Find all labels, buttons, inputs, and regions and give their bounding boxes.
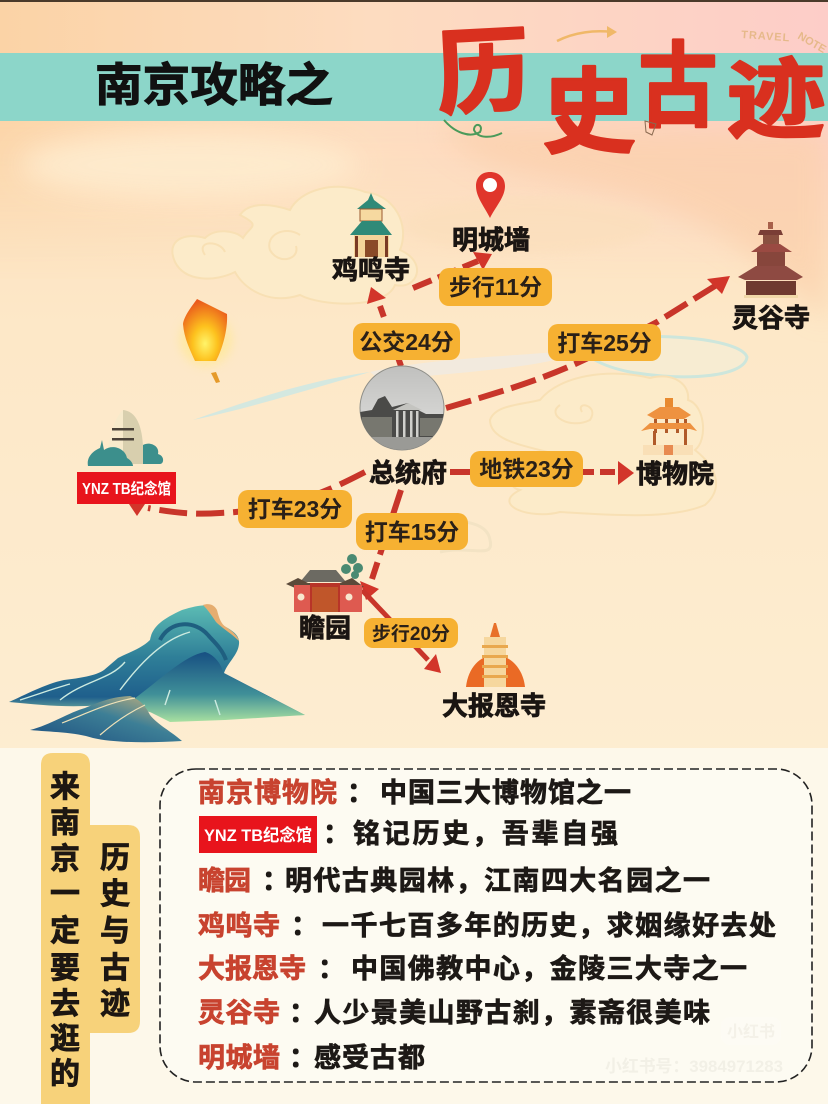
list row: YNZ TB纪念馆: YNZ TB纪念馆 [204, 825, 312, 845]
label: 大报恩寺: 大报恩寺 [442, 691, 546, 721]
mountains [9, 604, 305, 742]
pill: 公交24分: 公交24分 [359, 329, 454, 355]
list row: 灵谷寺: 人少景美山野古刹，素斋很美味 [314, 998, 710, 1028]
label: 博物院: 博物院 [636, 459, 714, 489]
pill: 步行11分: 步行11分 [449, 274, 542, 300]
watermark: 小红书号：3984971283 [605, 1057, 783, 1076]
lower wisp [440, 522, 491, 552]
lantern [180, 299, 232, 383]
label: 总统府: 总统府 [369, 458, 447, 488]
decoration: arrow and travel text: NOTE [796, 30, 828, 56]
pill: 打车25分: 打车25分 [557, 330, 652, 356]
pill: 打车15分 [356, 513, 468, 550]
icon: 灵谷寺 temple [738, 222, 803, 298]
list row: 明城墙 [198, 1042, 425, 1073]
list row: YNZ TB纪念馆: ： [323, 819, 350, 849]
watermark [605, 1017, 783, 1076]
tab: 来南京一定要去逛的: 来 [50, 771, 80, 804]
icon: 瞻园 gate [286, 554, 364, 612]
tab: 来南京一定要去逛的: 定 [50, 915, 80, 948]
list row: 鸡鸣寺: ： [291, 911, 318, 941]
list row: 南京博物院: ： [347, 778, 374, 808]
tab: 来南京一定要去逛的: 的 [50, 1058, 80, 1091]
light teal sweep [193, 336, 747, 420]
list row: 瞻园: 明代古典园林，江南四大名园之一 [285, 866, 710, 896]
list row: YNZ TB纪念馆: 铭记历史，吾辈自强 [353, 819, 618, 849]
icon: YNZ memorial [88, 410, 163, 466]
route: 打车 to 瞻园 [360, 490, 401, 600]
list row: 瞻园: ： [262, 866, 289, 896]
tab: 来南京一定要去逛的: 京 [50, 843, 80, 876]
title: 历史古迹: 古 [638, 36, 718, 139]
pill: 打车15分: 打车15分 [365, 519, 459, 545]
tab: 历史与古迹 [90, 825, 140, 1033]
decoration: arrow and travel text: TRAVEL [741, 29, 791, 44]
pin: 明城墙 [476, 172, 505, 218]
title band [0, 53, 828, 121]
title: 历史古迹: 历 [434, 19, 532, 127]
icon: 鸡鸣寺 pagoda [350, 193, 392, 257]
pill: 步行20分 [364, 618, 458, 648]
title: 南京攻略之: 南京攻略之 [95, 59, 333, 111]
tab: 来南京一定要去逛的: 要 [50, 952, 80, 985]
dashed list box [160, 769, 812, 1082]
tab: 来南京一定要去逛的 [41, 753, 90, 1104]
route: 地铁 to 博物院 [450, 461, 634, 485]
list row: 大报恩寺: 中国佛教中心，金陵三大寺之一 [351, 954, 747, 984]
label: 明城墙: 明城墙 [452, 225, 530, 255]
pill: 步行11分 [439, 268, 552, 306]
list row: 灵谷寺: ： [289, 998, 316, 1028]
list row: YNZ TB纪念馆 [199, 816, 618, 853]
list row: 大报恩寺: ： [318, 954, 345, 984]
lower panel [0, 748, 828, 1104]
route: 公交 to 鸡鸣寺 [367, 287, 401, 366]
icon: 博物院 pavilion [641, 398, 697, 455]
route: 打车 to 灵谷寺 [446, 276, 730, 408]
cloud: right [490, 374, 716, 515]
tab: 历史与古迹: 历 [100, 842, 130, 875]
list row: 鸡鸣寺: 一千七百多年的历史，求姻缘好去处 [322, 911, 776, 941]
label: 灵谷寺: 灵谷寺 [732, 303, 810, 333]
route: 步行 to 大报恩寺 [362, 590, 441, 673]
list row: 明城墙: 感受古都 [314, 1042, 425, 1073]
pill: 打车23分: 打车23分 [248, 496, 342, 522]
list row: 瞻园: 瞻园 [198, 866, 251, 896]
label: YNZ TB纪念馆 tag: YNZ TB纪念馆 [82, 479, 171, 498]
list row: 鸡鸣寺: 鸡鸣寺 [198, 911, 280, 941]
pill: 地铁23分: 地铁23分 [479, 456, 574, 482]
decoration: arrow and travel text [444, 26, 828, 137]
cloud: upper left [172, 187, 417, 304]
tab: 历史与古迹: 迹 [100, 988, 130, 1021]
tab: 来南京一定要去逛的: 一 [50, 878, 80, 911]
label: 瞻园: 瞻园 [299, 613, 351, 643]
icon: 大报恩寺 tower [466, 623, 525, 687]
pill: 地铁23分 [470, 451, 583, 487]
list row: 南京博物院: 中国三大博物馆之一 [380, 778, 631, 808]
title: 历史古迹: 迹 [727, 52, 825, 149]
label: YNZ TB纪念馆 tag [77, 472, 176, 504]
list row: 灵谷寺: 灵谷寺 [198, 998, 280, 1028]
label: 鸡鸣寺: 鸡鸣寺 [332, 255, 410, 285]
list row: 南京博物院 [198, 778, 631, 808]
tab: 历史与古迹: 古 [100, 952, 130, 985]
title: 历史古迹 [434, 19, 825, 165]
mountain: rear peak [9, 605, 305, 720]
tab: 来南京一定要去逛的: 逛 [50, 1023, 80, 1056]
pill: 步行20分: 步行20分 [372, 623, 450, 645]
pill: 打车23分 [238, 490, 352, 528]
list row: 南京博物院: 南京博物院 [198, 778, 337, 808]
route: 打车 to YNZ [129, 472, 365, 516]
pill: 公交24分 [353, 323, 460, 360]
watermark: 小红书 [727, 1022, 775, 1041]
tab: 历史与古迹: 与 [100, 915, 130, 948]
title: 历史古迹: 史 [542, 61, 636, 165]
list row: 明城墙: 明城墙 [198, 1042, 280, 1073]
tab: 历史与古迹: 史 [100, 878, 130, 911]
tab: 来南京一定要去逛的: 去 [50, 988, 80, 1021]
mountain: front hill [30, 696, 182, 742]
background [0, 0, 828, 748]
pill: 打车25分 [548, 324, 661, 361]
tab: 来南京一定要去逛的: 南 [50, 807, 80, 840]
photo: 总统府 [360, 366, 446, 452]
route: 步行 to 明城墙 [413, 252, 492, 288]
list row: 大报恩寺: 大报恩寺 [198, 954, 306, 984]
list row: 明城墙: ： [289, 1043, 316, 1073]
